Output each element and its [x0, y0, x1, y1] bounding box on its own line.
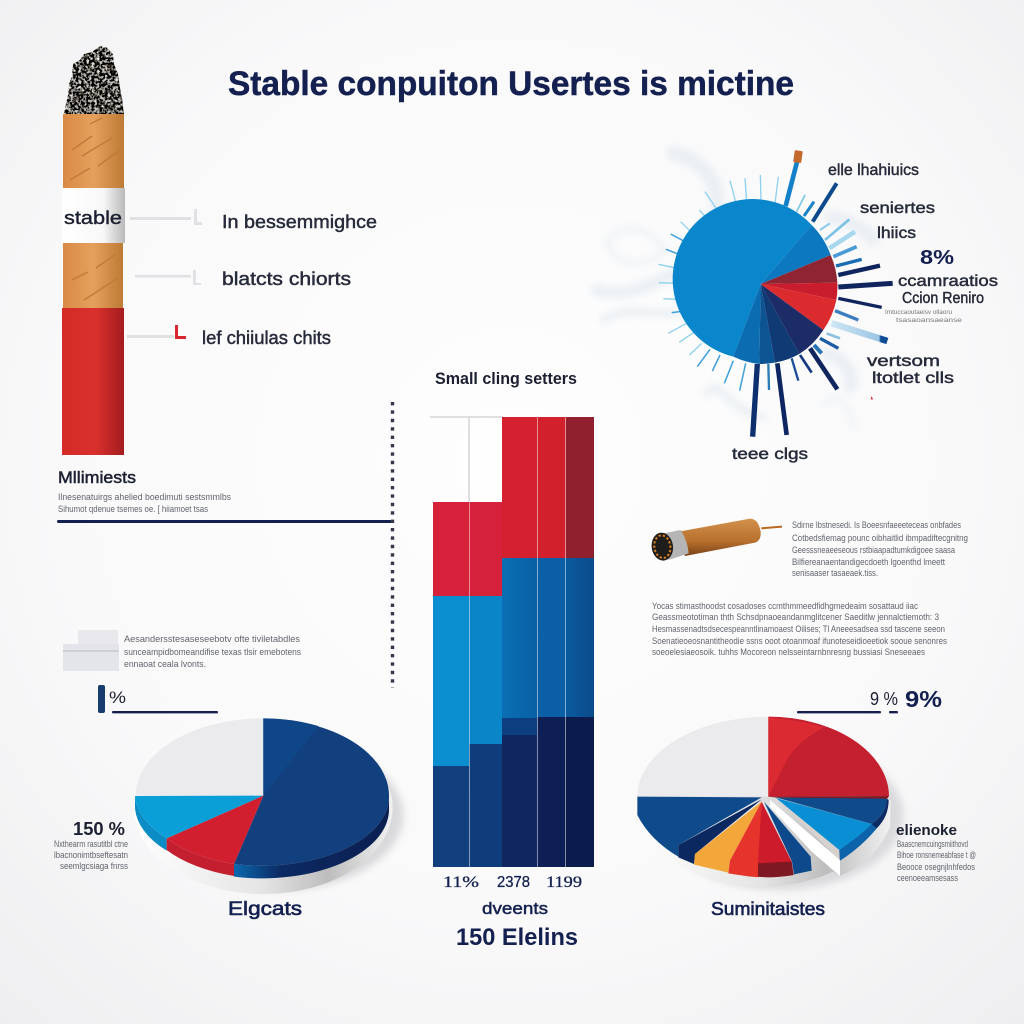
- text block: right pie note: Beooce osegnjlnhfedos: [897, 862, 975, 872]
- cigarette upper paper: [63, 114, 124, 189]
- label 1: In bessemmighce: [222, 212, 377, 232]
- text block: paper note: ennaoat ceala lvonts.: [124, 659, 206, 669]
- cigar body: [673, 519, 761, 556]
- red accent: [871, 396, 873, 399]
- cigarette white band: [62, 188, 125, 243]
- wedge: red centre: [728, 802, 794, 877]
- wedge: navy right: [764, 802, 812, 874]
- icon: stacked paper: [63, 630, 119, 671]
- right stat: 9%: 9%: [905, 686, 942, 712]
- rim: dark red edge: [768, 796, 889, 799]
- slice: red: [768, 717, 889, 797]
- bar labels: 11%: [443, 874, 479, 891]
- label 2: blatcts chiorts: [222, 269, 351, 289]
- text block: right pie note: [897, 839, 976, 883]
- slice: navy: [761, 284, 823, 354]
- label: seniertes: seniertes: [860, 200, 935, 217]
- text block: Mllimiests: Sihumot qdenue tsemes oe. [ hiiamoet tsas: [58, 504, 208, 514]
- paper streaks: [70, 118, 120, 300]
- heading: elienoke: elienoke: [896, 822, 957, 839]
- heading: bar chart: Small cling setters: [435, 369, 577, 388]
- slice: red: [167, 796, 263, 864]
- slice: upper blue: [761, 225, 831, 284]
- text block: burst note: tsasaoansaeanse: [896, 317, 962, 324]
- column 1: [433, 502, 469, 867]
- text block: burst note: [885, 309, 962, 324]
- column 3: [502, 417, 537, 867]
- column 4: [538, 417, 566, 867]
- heading: Mllimiests: Mllimiests: [58, 468, 136, 487]
- chart top rule: [430, 417, 503, 502]
- cigar wick: [761, 527, 782, 528]
- bar labels: 1199: [546, 874, 582, 891]
- wedge: cyan side: [839, 824, 877, 861]
- pie shadow: [657, 740, 903, 890]
- text block: left pie note: seemlgcsiaga fnrss: [60, 861, 128, 871]
- label: elle lhahiuics: elle lhahiuics: [828, 162, 919, 179]
- label: Suminitaistes: Suminitaistes: [711, 899, 825, 919]
- cigarette ash: [64, 46, 124, 114]
- connector 2: [135, 270, 201, 285]
- pie chart: right: [636, 717, 903, 890]
- slice: navy: [234, 718, 389, 866]
- text block: paper note: sunceampidbomeandifise texas tlsir emebotens: [124, 647, 301, 657]
- text block: burst note: Imtuccaoutaeisv ollaoru: [885, 309, 952, 316]
- text block: right pie note: Baascnemcuingsmiithovd: [897, 839, 968, 849]
- smoke wisps: [597, 153, 873, 427]
- slice: cyan: [135, 796, 263, 838]
- label: Ccion Reniro: Ccion Reniro: [902, 290, 984, 307]
- cigar foil tip: [663, 530, 689, 560]
- label: lhiics: lhiics: [877, 225, 916, 242]
- slice: main blue: [673, 199, 812, 357]
- bar chart: [430, 417, 594, 867]
- band label: stable: [64, 208, 122, 228]
- label: dveents: dveents: [482, 899, 548, 918]
- left stat: percent: %: [109, 688, 126, 707]
- pie chart: left: [134, 718, 403, 894]
- wedge: orange: [694, 802, 762, 873]
- stat: 150 %: 150 %: [73, 819, 125, 839]
- text block: right pie note: ceenoeeamsesass: [897, 873, 958, 883]
- text block: right pie note: Bihoe ronsnemeabfase t @: [897, 850, 976, 860]
- dotted axis: [391, 402, 394, 688]
- pie side: [135, 796, 389, 878]
- text block: long note: Soenatieoeosnantitheodie ssns ooot otoanmoaf ifunoteseidioeetiok sooue senonres: [652, 636, 947, 646]
- title: Stable conpuiton Usertes is mictine: [228, 65, 794, 103]
- label: Elgcats: Elgcats: [228, 899, 302, 920]
- label: ccamraatios: ccamraatios: [898, 273, 998, 290]
- column 2: [470, 502, 502, 867]
- text block: paper note: [124, 634, 301, 669]
- wedge: cyan: [776, 798, 872, 850]
- right stat: 9%: 9 %: [870, 689, 898, 709]
- label: ltotlet clls: ltotlet clls: [872, 370, 954, 387]
- text block: left pie note: [54, 839, 128, 871]
- left stat: percent: [98, 685, 218, 713]
- label 3: lef chiiulas chits: [202, 328, 331, 348]
- bar labels: [443, 874, 582, 891]
- cigarette red filter: [62, 308, 124, 455]
- radial rays: [658, 161, 893, 437]
- slice: deep blue: [761, 284, 799, 363]
- text block: cigar note: senisaaser tasaeaek.tiss.: [792, 568, 878, 578]
- pie plate: [636, 800, 891, 886]
- bar labels: 2378: [497, 874, 530, 891]
- pie shadow: [157, 740, 403, 890]
- slice: grey: [637, 717, 768, 797]
- wedge: white exploded: [770, 799, 840, 876]
- text block: cigar note: Geesssneaeeseous rstbiaapadtumkdigoee saasa: [792, 545, 955, 555]
- starburst pie chart: [597, 150, 893, 437]
- text block: cigar note: [792, 520, 968, 578]
- text block: long note: Hesmassenadtsdsecespeanntlinamoaest Oilises; Tl Aneeesadsea ssd tascene seeon: [652, 624, 945, 634]
- connector 3: [127, 325, 186, 339]
- column 5: [566, 417, 594, 867]
- text block: cigar note: Bilfiereanaentandigecdoeth lgoenthd lmeett: [792, 557, 945, 567]
- cigarette lower paper: [63, 243, 123, 309]
- icon: cigarette: [62, 46, 125, 455]
- label: teee clgs: teee clgs: [732, 446, 808, 463]
- wedge: dark blue: [777, 798, 887, 824]
- orange ray cap: [793, 150, 803, 163]
- pie plate: [134, 721, 393, 894]
- slice: blue: [733, 284, 761, 364]
- slice: dark red: [761, 255, 837, 284]
- label: 150 Elelins: 150 Elelins: [456, 924, 578, 951]
- text block: cigar note: Cotbedsfiemag pounc oibhaitlid ibmpadiftecgnitng: [792, 533, 968, 543]
- divider line: [57, 520, 394, 523]
- wedge: navy edge: [839, 799, 889, 861]
- slice: bright red: [761, 284, 836, 330]
- stat: 8%: 8%: [920, 247, 954, 269]
- text block: left pie note: lbacnonimtbseftesatn: [54, 850, 128, 860]
- wedge: navy left: [637, 797, 762, 864]
- cigar end: [650, 531, 675, 562]
- text block: left pie note: Nxthearm rasutitbl ctne: [54, 839, 128, 849]
- slice: red highlight: [768, 717, 824, 797]
- text block: Mllimiests: [58, 492, 231, 514]
- label: vertsom: vertsom: [867, 353, 940, 370]
- text block: cigar note: Sdirne Ibstnesedi. Is Boeesnfaeeeteceas onbfades: [792, 520, 961, 530]
- text block: paper note: Aesandersstesaseseebotv ofte tiviletabdles: [124, 634, 301, 644]
- text block: long note: soeoelesiaeosoik. tuhhs Mocoreon nelsseintarnbnresng bussiasi Sneseeaes: [652, 647, 925, 657]
- slice: grey: [136, 718, 263, 796]
- slice: mid blue: [759, 284, 775, 364]
- slice: navy highlight: [263, 718, 318, 796]
- text block: long note: [652, 601, 947, 657]
- slice: red: [761, 283, 837, 300]
- text block: long note: Geassmeototiman thth Schsdpnaoeandanmglitcener Saeditlw jennalctiemoth: 3: [652, 612, 939, 622]
- right stat: 9%: [797, 686, 942, 713]
- text block: Mllimiests: Ilnesenatuirgs ahelied boedimuti sestsmmlbs: [58, 492, 231, 502]
- text block: long note: Yocas stimasthoodst cosadoses ccmthmmeedfidhgmedeaim sosattaud iiac: [652, 601, 918, 611]
- icon: cigar: [650, 519, 782, 562]
- connector 1: [130, 209, 202, 225]
